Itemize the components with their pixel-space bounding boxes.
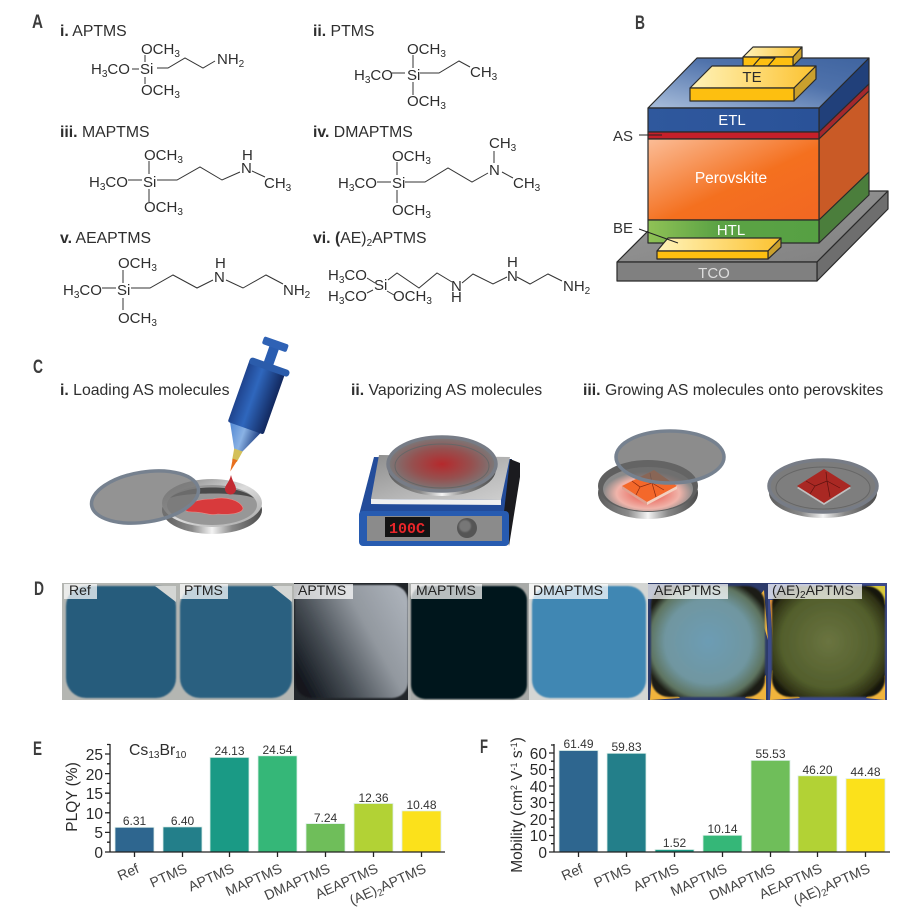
x tick labels: APTMS [186,860,236,894]
dish [769,460,877,518]
glass lid [88,464,202,530]
top electrode TE [690,47,816,101]
top electrode TE: TE [742,69,762,86]
perovskite device block: ETL [718,112,746,129]
panel label D: D [34,579,44,600]
syringe [212,334,298,479]
panel E: PLQY bar chart [33,739,445,911]
label AS with leader: AS [613,128,633,145]
step iii: lifted lid over heated perovskite [598,431,724,519]
photo: (AE)2APTMS [768,582,887,700]
panel D: perovskite film photo strip [34,579,887,700]
molecule iv: DMAPTMS: OCH3 [392,148,431,167]
red drop [225,475,236,495]
step ii: hot plate with dish [359,437,520,546]
value labels: 1.52 [663,836,687,850]
axes with ticks [105,744,445,857]
panel C: vapor deposition steps [33,334,883,546]
photo: MAPTMS [411,582,529,700]
molecule ii: PTMS [313,23,498,112]
photo: APTMS [294,582,411,700]
value labels: 55.53 [755,747,786,761]
molecule iii: MAPTMS: OCH3 [144,147,183,166]
photo: PTMS [178,582,294,700]
x tick labels: DMAPTMS [262,860,332,903]
x tick labels: DMAPTMS [707,860,777,903]
molecule v: AEAPTMS: N [214,269,225,286]
value labels: 10.48 [406,798,437,812]
photo: DMAPTMS [529,582,648,700]
y tick labels [530,746,547,862]
y tick labels: 10 [86,806,103,823]
panel F: mobility bar chart [480,737,890,911]
molecule iv: DMAPTMS: CH3 [489,135,517,154]
molecule ii: PTMS: ii. PTMS [313,23,374,40]
bars [115,756,441,852]
molecule v: AEAPTMS: H [215,255,226,272]
molecule ii: PTMS: Si [407,67,420,84]
red film on substrate [797,469,851,505]
hot plate body: 100C [389,521,425,538]
chart subtitle: Cs13Br10 [129,742,187,761]
x tick labels: Ref [115,860,141,884]
y tick labels: 15 [86,786,103,803]
molecule vi: (AE)2APTMS: N [507,268,518,285]
molecule iv: DMAPTMS: N [489,162,500,179]
step ii heading: ii. Vaporizing AS molecules [351,382,542,399]
molecule v: AEAPTMS: OCH3 [118,255,157,274]
molecule v: AEAPTMS: OCH3 [118,310,157,329]
molecule ii: PTMS: H3CO [354,67,393,86]
panel A: silane molecular structures [32,12,591,329]
molecule vi: (AE)2APTMS: OCH3 [393,288,432,307]
value labels: 46.20 [802,763,833,777]
y tick labels: 40 [530,779,547,796]
molecule iii: MAPTMS: OCH3 [144,199,183,218]
photo: (AE)2APTMS: (AE)2APTMS [772,582,854,601]
molecule i: APTMS: i. APTMS [60,23,127,40]
value labels [563,737,881,850]
x tick labels: MAPTMS [223,860,284,899]
molecule v: AEAPTMS: Si [117,282,130,299]
y tick labels: 0 [538,845,547,862]
molecule i: APTMS: NH2 [217,51,245,70]
molecule iv: DMAPTMS: H3CO [338,175,377,194]
molecule iii: MAPTMS: CH3 [264,175,292,194]
value labels: 61.49 [563,737,594,751]
tilted glass lid [616,431,724,483]
step i: syringe dropping into open dish [88,334,298,534]
hot plate body [359,455,520,546]
x tick labels: AEAPTMS [313,860,380,902]
panel B: device layer stack [613,13,888,282]
value labels: 6.40 [171,814,195,828]
molecule iv: DMAPTMS: Si [392,175,405,192]
molecule v: AEAPTMS: NH2 [283,282,311,301]
y tick labels: 25 [86,747,103,764]
molecule vi: (AE)2APTMS: vi. (AE)2APTMS [313,230,427,249]
y tick labels: 0 [94,845,103,862]
perovskite device block: Perovskite [695,170,767,187]
x tick labels: Ref [559,860,585,884]
x tick labels: AEAPTMS [757,860,824,902]
y tick labels: 30 [530,795,547,812]
photo: APTMS: APTMS [298,582,346,598]
label AS with leader [613,128,662,145]
label BE with leader: BE [613,220,633,237]
x tick labels: (AE)2APTMS [347,860,429,911]
TCO substrate: TCO [698,265,730,282]
molecule iv: DMAPTMS: CH3 [513,175,541,194]
y tick labels: 5 [94,825,103,842]
panel label C: C [33,357,43,378]
axes with ticks [549,744,890,857]
y tick labels: 50 [530,762,547,779]
molecule iii: MAPTMS: iii. MAPTMS [60,124,150,141]
molecule ii: PTMS: OCH3 [407,41,446,60]
x tick labels: PTMS [591,860,633,891]
x tick labels: APTMS [631,860,681,894]
molecule vi: (AE)2APTMS: H3CO [328,288,367,307]
value labels [123,743,437,828]
perovskite device block [648,58,869,243]
molecule vi: (AE)2APTMS: H [451,289,462,306]
photo: AEAPTMS [648,582,768,700]
molecule i: APTMS: OCH3 [141,82,180,101]
y tick labels [86,747,103,862]
step i heading: i. Loading AS molecules [60,382,230,399]
molecule ii: PTMS: CH3 [470,64,498,83]
y axis title: PLQY (%) [64,762,81,832]
y tick labels: 10 [530,828,547,845]
molecule vi: (AE)2APTMS: H3CO [328,267,367,286]
value labels: 12.36 [358,791,389,805]
value labels: 24.13 [214,744,245,758]
photo: Ref: Ref [69,582,91,598]
panel label F: F [480,737,488,758]
molecule v: AEAPTMS: H3CO [63,282,102,301]
y axis title: Mobility (cm2 V-1 s-1) [509,737,526,873]
molecule vi: (AE)2APTMS: H [507,254,518,271]
molecule vi: (AE)2APTMS: Si [374,277,387,294]
value labels: 10.14 [707,822,738,836]
label BE with leader [613,220,678,243]
molecule vi: (AE)2APTMS: NH2 [563,278,591,297]
photo: MAPTMS: MAPTMS [416,582,476,598]
step iii: closed dish with grown film [769,460,877,518]
y tick labels: 20 [530,812,547,829]
bars [559,750,885,852]
panel label A: A [32,12,43,33]
x tick labels: (AE)2APTMS [791,860,873,911]
open metal dish with red liquid [162,479,262,534]
TCO substrate [617,191,888,282]
value labels: 6.31 [123,814,147,828]
molecule iv: DMAPTMS: iv. DMAPTMS [313,124,413,141]
molecule v: AEAPTMS: v. AEAPTMS [60,230,151,247]
molecule iii: MAPTMS: H3CO [89,174,128,193]
y tick labels: 60 [530,746,547,763]
photo: AEAPTMS: AEAPTMS [654,582,721,598]
molecule vi: (AE)2APTMS [313,230,591,307]
metal dish [598,460,698,519]
value labels: 44.48 [850,765,881,779]
y tick labels: 20 [86,767,103,784]
value labels: 59.83 [611,740,642,754]
x tick labels: MAPTMS [668,860,729,899]
molecule ii: PTMS: OCH3 [407,93,446,112]
panel label B: B [635,13,645,34]
photo: DMAPTMS: DMAPTMS [533,582,603,598]
photo: PTMS: PTMS [184,582,223,598]
panel label E: E [33,739,42,760]
molecule i: APTMS [60,23,245,101]
molecule v: AEAPTMS [60,230,311,329]
molecule iii: MAPTMS: H [242,147,253,164]
molecule i: APTMS: Si [140,61,153,78]
bottom electrode BE [657,238,781,259]
molecule iii: MAPTMS [60,124,292,218]
molecule iii: MAPTMS: Si [143,174,156,191]
cracked perovskite film [622,470,677,505]
perovskite device block: HTL [717,222,745,239]
value labels: 7.24 [314,811,338,825]
value labels: 24.54 [262,743,293,757]
glass dish with red vapor [388,437,496,496]
molecule iv: DMAPTMS: OCH3 [392,202,431,221]
photo: Ref [62,582,178,700]
step iii heading: iii. Growing AS molecules onto perovskites [583,382,883,399]
molecule iii: MAPTMS: N [241,160,252,177]
molecule i: APTMS: H3CO [91,61,130,80]
x tick labels: PTMS [147,860,189,891]
molecule i: APTMS: OCH3 [141,41,180,60]
x tick labels [559,860,873,911]
molecule vi: (AE)2APTMS: N [451,278,462,295]
x tick labels [115,860,429,911]
molecule iv: DMAPTMS [313,124,541,221]
